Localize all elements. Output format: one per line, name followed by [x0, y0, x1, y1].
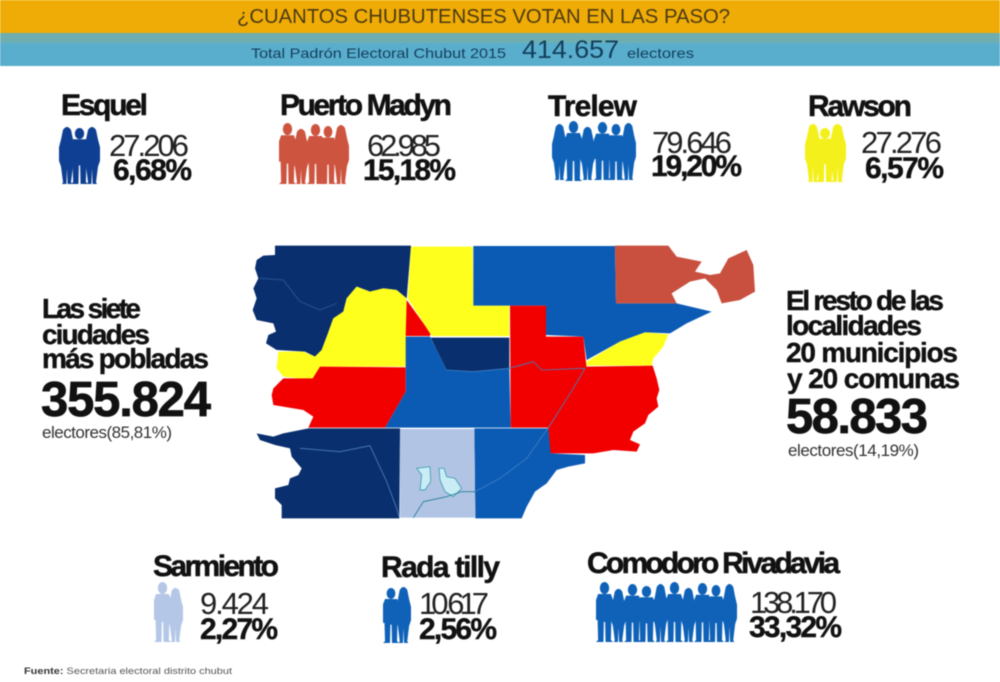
map of Chubut	[253, 246, 755, 518]
text block: remaining localities: 20 municipios	[786, 337, 958, 368]
region: north yellow	[408, 247, 509, 336]
panel: Comodoro Rivadavia: 138.170	[750, 585, 837, 620]
panel: Puerto Madyn	[279, 89, 456, 187]
text block: seven cities: electores(85,81%)	[42, 423, 172, 442]
text block: remaining localities: electores(14,19%)	[788, 441, 919, 460]
panel: Esquel: 27.206	[109, 128, 189, 163]
region: east red	[548, 366, 659, 453]
panel: Rada tilly: Rada tilly	[381, 551, 500, 584]
icon: people Comodoro Rivadavia	[596, 582, 737, 642]
lakes	[417, 467, 462, 497]
panel: Rawson	[805, 90, 944, 185]
panel: Sarmiento: 2,27%	[200, 613, 278, 646]
title: ¿CUANTOS CHUBUTENSES VOTAN EN LAS PASO?	[237, 6, 730, 28]
header band: title	[0, 0, 1000, 33]
panel: Rada tilly: 10.617	[419, 586, 489, 621]
text block: seven cities	[41, 293, 211, 442]
panel: Esquel: Esquel	[61, 89, 148, 122]
text block: remaining localities	[786, 285, 960, 460]
region: south-west red	[272, 367, 406, 428]
header band: total electoral roll	[0, 33, 1000, 66]
panel: Rawson: 27.276	[861, 125, 942, 160]
text block: seven cities: más pobladas	[42, 343, 209, 374]
region: central navy	[431, 338, 509, 372]
total label: Total Padrón Electoral Chubut 2015	[251, 45, 506, 61]
icon: people Rada tilly	[383, 587, 411, 643]
text block: seven cities: ciudades	[42, 319, 150, 350]
panel: Puerto Madyn: Puerto Madyn	[280, 89, 452, 122]
panel: Sarmiento: Sarmiento	[153, 550, 279, 583]
text block: remaining localities: 58.833	[786, 390, 928, 444]
panel: Trelew: 79.646	[652, 125, 732, 160]
panel: Rawson: Rawson	[808, 90, 912, 123]
panel: Comodoro Rivadavia: Comodoro Rivadavia	[587, 547, 840, 580]
panel: Trelew: 19,20%	[651, 150, 742, 183]
panel: Esquel	[59, 89, 192, 187]
region: small red	[406, 300, 431, 336]
icon: people Esquel	[59, 127, 100, 184]
region: central blue	[385, 337, 511, 428]
panel: Rada tilly	[381, 551, 500, 646]
text block: remaining localities: El resto de las	[786, 285, 944, 316]
region: west yellow	[277, 287, 407, 378]
panel: Sarmiento	[153, 550, 279, 646]
region: north-west navy	[253, 246, 411, 357]
icon: people Puerto Madyn	[279, 123, 349, 184]
region: south-west navy	[257, 428, 400, 518]
region: central red	[510, 306, 587, 428]
icon: people Trelew	[552, 121, 636, 181]
region: south blue	[474, 428, 585, 518]
total number: 414.657	[522, 36, 619, 64]
region: Puerto Madryn rust	[615, 246, 755, 303]
panel: Rada tilly: 2,56%	[419, 613, 497, 646]
text block: seven cities: Las siete	[42, 293, 141, 324]
text block: seven cities: 355.824	[41, 373, 211, 427]
region: Sarmiento light blue	[400, 429, 475, 518]
source note: Fuente: Secretaria electoral distrito chubut	[24, 666, 232, 677]
panel: Sarmiento: 9.424	[200, 586, 269, 621]
panel: Puerto Madyn: 62.985	[367, 128, 441, 163]
panel: Trelew	[548, 90, 742, 183]
icon: people Sarmiento	[154, 582, 183, 642]
region: east yellow	[587, 332, 668, 366]
rivers	[260, 278, 585, 518]
text block: remaining localities: localidades	[786, 310, 922, 341]
region: north and coast blue	[473, 246, 712, 360]
icon: people Rawson	[805, 124, 846, 182]
total unit: electores	[627, 45, 694, 61]
panel: Comodoro Rivadavia: 33,32%	[749, 611, 842, 644]
panel: Puerto Madyn: 15,18%	[363, 154, 456, 187]
text block: remaining localities: y 20 comunas	[787, 363, 960, 394]
panel: Comodoro Rivadavia	[587, 547, 842, 644]
panel: Rawson: 6,57%	[865, 152, 944, 185]
panel: Trelew: Trelew	[548, 90, 638, 123]
panel: Esquel: 6,68%	[113, 154, 192, 187]
